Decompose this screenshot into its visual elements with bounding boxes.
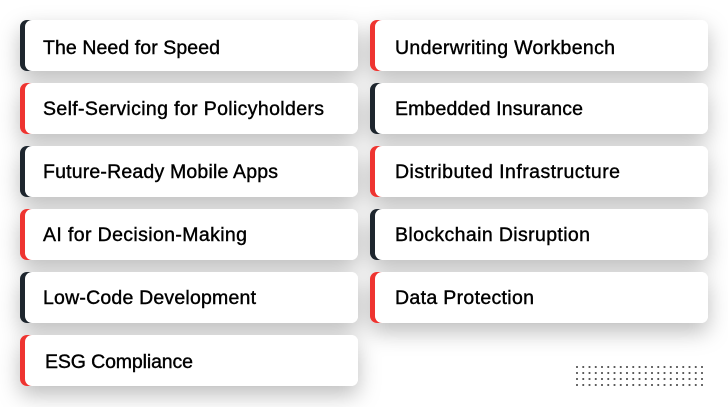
card: Underwriting Workbench xyxy=(370,20,708,71)
card: Blockchain Disruption: Blockchain Disruption xyxy=(395,224,590,246)
card: Underwriting Workbench: Underwriting Workbench xyxy=(395,37,615,59)
card: AI for Decision-Making xyxy=(20,209,358,260)
card: The Need for Speed: The Need for Speed xyxy=(43,37,220,59)
card: The Need for Speed xyxy=(20,20,358,71)
card: Low-Code Development: Low-Code Development xyxy=(43,287,257,309)
card: Data Protection xyxy=(370,272,708,323)
card: Distributed Infrastructure xyxy=(370,146,708,197)
card: Distributed Infrastructure: Distributed Infrastructure xyxy=(395,161,620,183)
card: Self-Servicing for Policyholders: Self-Servicing for Policyholders xyxy=(43,98,324,120)
card: Future-Ready Mobile Apps: Future-Ready Mobile Apps xyxy=(43,161,278,183)
card: Future-Ready Mobile Apps xyxy=(20,146,358,197)
card: ESG Compliance: ESG Compliance xyxy=(45,351,193,373)
card: Data Protection: Data Protection xyxy=(395,287,534,309)
card: Self-Servicing for Policyholders xyxy=(20,83,358,134)
card: Low-Code Development xyxy=(20,272,358,323)
card: AI for Decision-Making: AI for Decision-Making xyxy=(43,224,247,246)
card: Embedded Insurance xyxy=(370,83,708,134)
decorative dot grid xyxy=(576,367,704,385)
card: ESG Compliance xyxy=(20,335,358,386)
card: Blockchain Disruption xyxy=(370,209,708,260)
card: Embedded Insurance: Embedded Insurance xyxy=(395,98,583,120)
